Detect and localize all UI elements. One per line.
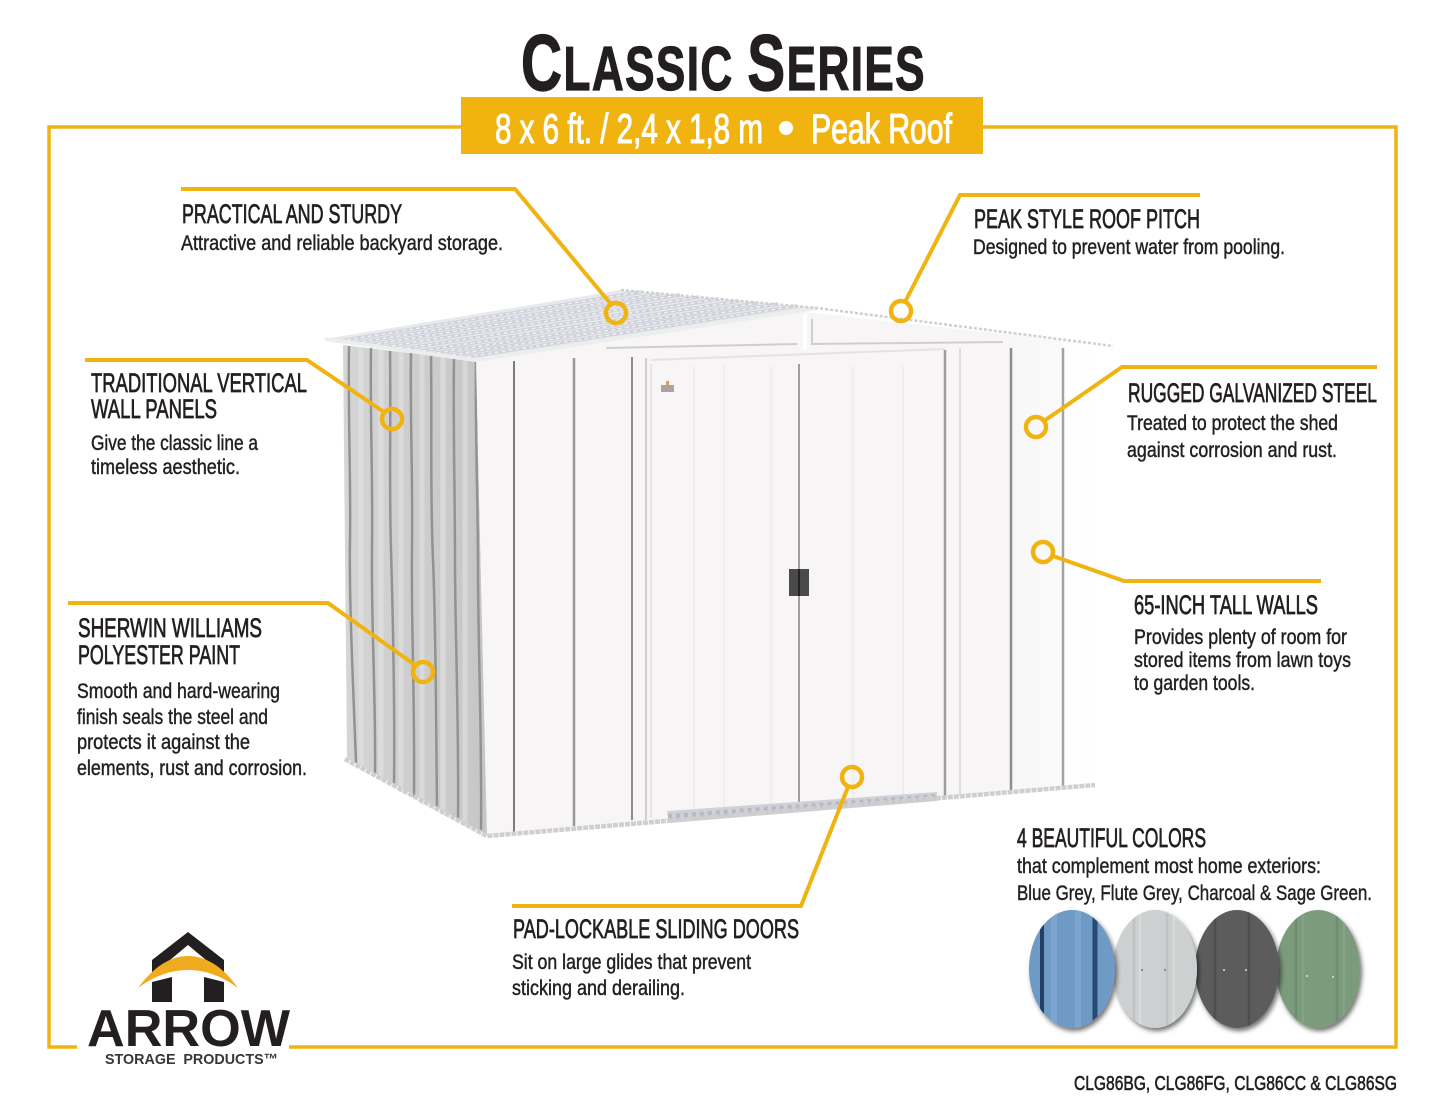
callout: traditional vertical wall panels [85, 360, 402, 479]
wall ribs [514, 348, 1063, 832]
callout: rugged galvanized steel: Treated to protect the shed [1127, 411, 1338, 435]
callout: sherwin williams polyester paint: Smooth and hard-wearing [77, 679, 280, 703]
base rail [345, 759, 1095, 836]
callout: peak style roof pitch: PEAK STYLE ROOF PITCH [974, 204, 1200, 234]
callout: 65-inch tall walls: to garden tools. [1134, 671, 1255, 695]
door emblem [661, 381, 674, 392]
door handle [789, 569, 809, 596]
callout: practical and sturdy: Attractive and reliable backyard storage. [181, 231, 503, 255]
callout: traditional vertical wall panels: timeless aesthetic. [91, 455, 240, 479]
subtitle banner [461, 97, 983, 154]
logo: arrow storage products [87, 932, 291, 1068]
title: CLASSIC SERIES [521, 18, 926, 107]
door glides [667, 792, 937, 823]
callout: sherwin williams polyester paint [68, 603, 433, 780]
callout: pad-lockable sliding doors: Sit on large glides that prevent [512, 950, 751, 974]
callout: 65-inch tall walls: stored items from lawn toys [1134, 648, 1351, 672]
callout: rugged galvanized steel [1026, 367, 1377, 462]
callout: practical and sturdy: PRACTICAL AND STURDY [182, 199, 402, 229]
callout: sherwin williams polyester paint: SHERWIN WILLIAMS [78, 613, 262, 643]
colors text: 4 BEAUTIFUL COLORS [1017, 823, 1206, 853]
callout: 65-inch tall walls: 65-INCH TALL WALLS [1134, 590, 1318, 620]
callout: 65-inch tall walls [1033, 542, 1351, 695]
callout: pad-lockable sliding doors: sticking and derailing. [512, 976, 685, 1000]
callout: rugged galvanized steel: against corrosion and rust. [1127, 438, 1337, 462]
swatch: blue grey [1029, 905, 1115, 1030]
callout: traditional vertical wall panels: TRADITIONAL VERTICAL [91, 368, 307, 398]
swatch: flute grey [1113, 905, 1197, 1030]
callout: pad-lockable sliding doors: PAD-LOCKABLE SLIDING DOORS [513, 914, 799, 944]
callout: traditional vertical wall panels: Give the classic line a [91, 431, 258, 455]
callout: sherwin williams polyester paint: elements, rust and corrosion. [77, 756, 307, 780]
logo: arrow storage products: ARROW [87, 1000, 291, 1058]
swatch: sage green [1276, 905, 1360, 1030]
callout: practical and sturdy [181, 189, 626, 323]
subtitle banner: Peak Roof [811, 105, 952, 152]
colors text [1017, 823, 1372, 905]
colors text: that complement most home exteriors: [1017, 854, 1321, 878]
callout: 65-inch tall walls: Provides plenty of room for [1134, 625, 1347, 649]
gable trim [606, 314, 1003, 350]
callout: sherwin williams polyester paint: protects it against the [77, 730, 250, 754]
front wall [476, 312, 1113, 835]
left wall [343, 345, 487, 835]
logo: arrow storage products: STORAGE PRODUCTS™ [105, 1051, 278, 1068]
logo house icon [138, 932, 238, 1002]
callout: sherwin williams polyester paint: finish seals the steel and [77, 705, 268, 729]
swatch: charcoal [1195, 905, 1279, 1030]
roof [325, 290, 1113, 360]
color swatches [1029, 905, 1360, 1030]
subtitle banner: 8 x 6 ft. / 2,4 x 1,8 m [495, 105, 763, 152]
callout: pad-lockable sliding doors [512, 767, 862, 1000]
callout: traditional vertical wall panels: WALL PANELS [91, 394, 217, 424]
callout: sherwin williams polyester paint: POLYESTER PAINT [78, 640, 240, 670]
frame [49, 127, 1396, 1047]
shed illustration [325, 290, 1113, 836]
callout: peak style roof pitch [891, 195, 1285, 321]
callout: peak style roof pitch: Designed to prevent water from pooling. [973, 235, 1285, 259]
